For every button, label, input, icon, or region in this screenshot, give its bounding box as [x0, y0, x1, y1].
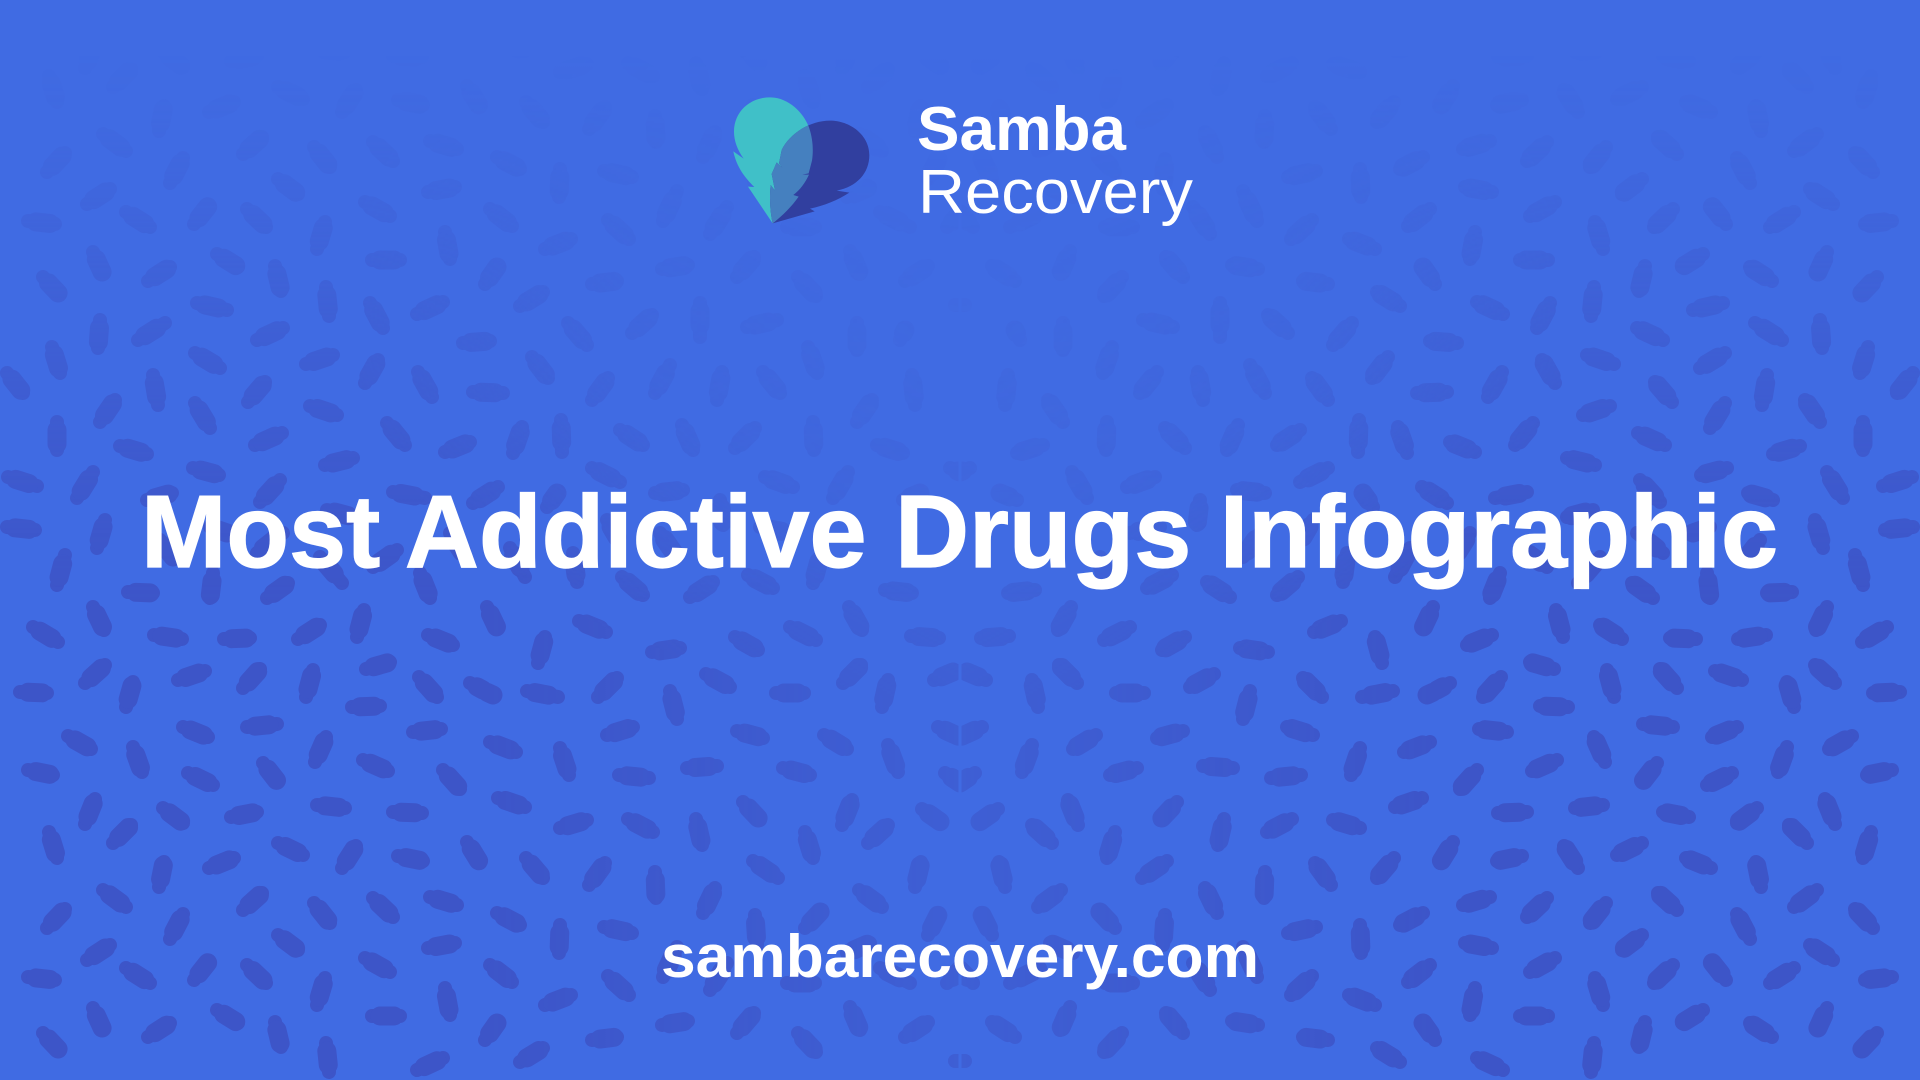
website url: sambarecovery.com: [661, 923, 1259, 990]
logo wordmark: Recovery: Recovery: [918, 158, 1193, 227]
background pattern of grains: [0, 224, 1920, 1079]
title: Most Addictive Drugs Infographic: [141, 474, 1778, 589]
logo wordmark: Samba: Samba: [917, 95, 1127, 164]
icon: heart of two feathers: [733, 97, 869, 223]
logo: Samba Recovery: [733, 95, 1193, 227]
